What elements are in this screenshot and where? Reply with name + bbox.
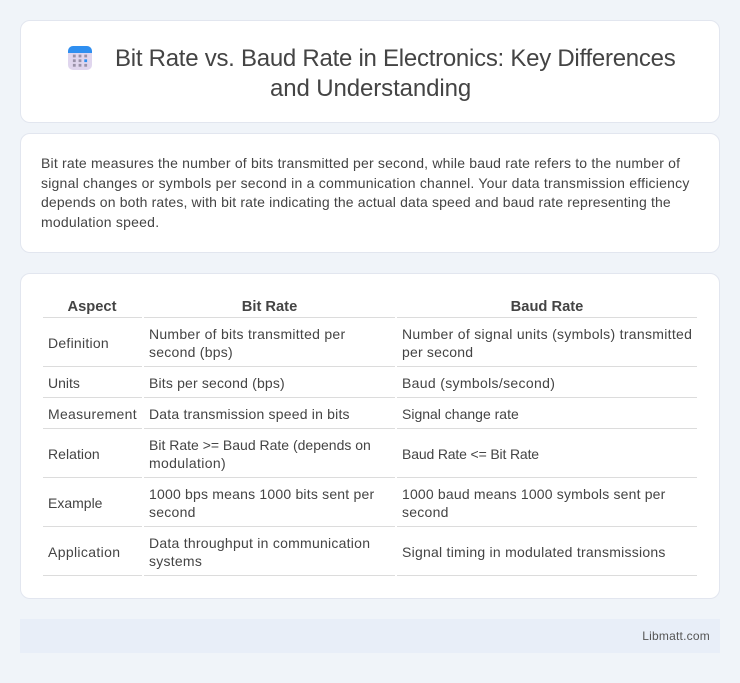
header: Bit Rate: Bit Rate bbox=[242, 299, 297, 315]
footer bar bbox=[20, 619, 720, 653]
heading bbox=[115, 45, 675, 102]
text: Baud (symbols/second) bbox=[402, 375, 555, 391]
text: per second bbox=[402, 344, 473, 360]
text: modulation) bbox=[149, 455, 226, 471]
header: Baud Rate: Baud Rate bbox=[511, 299, 583, 315]
text: Number of bits transmitted per bbox=[149, 326, 345, 342]
text block: intro: signal changes or symbols per second in a communication channel. Your data transmission efficiency bbox=[41, 175, 690, 191]
text: Bit Rate >= Baud Rate (depends on bbox=[149, 437, 371, 453]
text: Example bbox=[48, 495, 102, 511]
text: 1000 baud means 1000 symbols sent per bbox=[402, 486, 666, 502]
heading: and Understanding bbox=[270, 75, 471, 102]
text: Relation bbox=[48, 446, 100, 462]
text: Signal change rate bbox=[402, 406, 519, 422]
text: Baud Rate <= Bit Rate bbox=[402, 446, 539, 462]
text block: intro: Bit rate measures the number of bits transmitted per second, while baud rate refers to the number of bbox=[41, 155, 680, 171]
text: second bbox=[149, 504, 196, 520]
text block: intro bbox=[41, 155, 690, 230]
text block: intro: depends on both rates, with bit rate indicating the actual data speed and baud rate representing the bbox=[41, 194, 671, 210]
text: second (bps) bbox=[149, 344, 233, 360]
icon: calendar bbox=[68, 46, 92, 70]
text: Data throughput in communication bbox=[149, 535, 370, 551]
text: Bits per second (bps) bbox=[149, 375, 285, 391]
text: Application bbox=[48, 544, 120, 560]
text: Data transmission speed in bits bbox=[149, 406, 350, 422]
text: Measurement bbox=[48, 406, 137, 422]
text: Definition bbox=[48, 335, 109, 351]
text: systems bbox=[149, 553, 202, 569]
text: Number of signal units (symbols) transmitted bbox=[402, 326, 692, 342]
heading: Bit Rate vs. Baud Rate in Electronics: Key Differences bbox=[115, 45, 675, 72]
header: Aspect: Aspect bbox=[68, 299, 116, 315]
text block: intro: modulation speed. bbox=[41, 214, 159, 230]
panel: table bbox=[20, 273, 720, 599]
text: Signal timing in modulated transmissions bbox=[402, 544, 666, 560]
text: second bbox=[402, 504, 449, 520]
text: Units bbox=[48, 375, 80, 391]
panel: title bbox=[20, 20, 720, 123]
text: 1000 bps means 1000 bits sent per bbox=[149, 486, 374, 502]
panel: intro bbox=[20, 133, 720, 253]
footer text: Libmatt.com bbox=[642, 629, 710, 643]
